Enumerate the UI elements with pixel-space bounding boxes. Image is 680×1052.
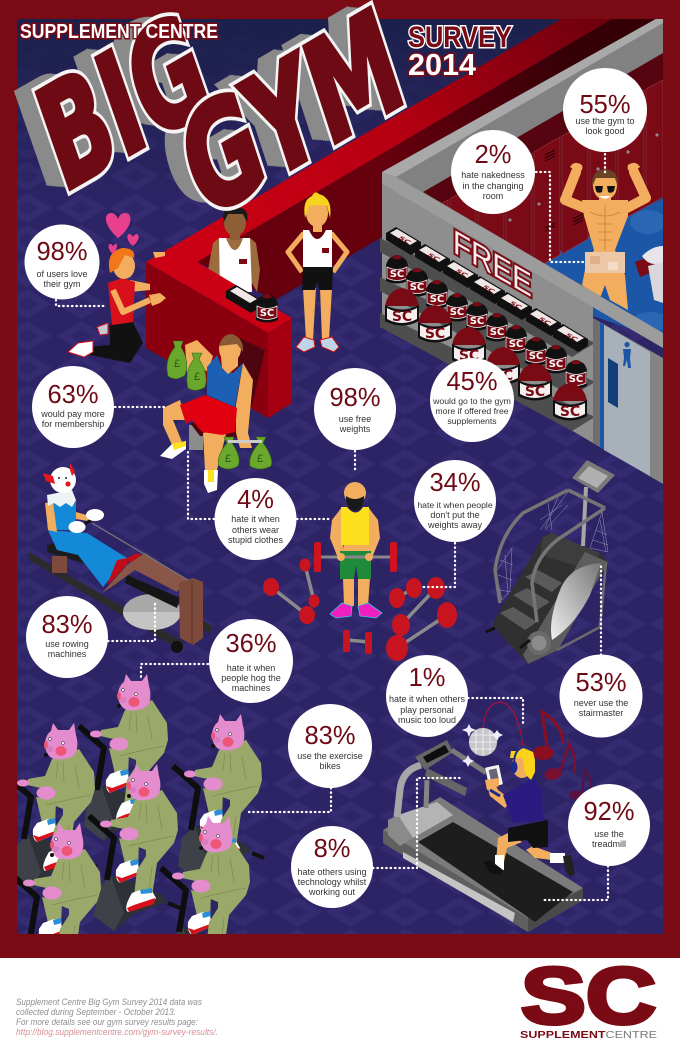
logo: Supplement Centre: SC: [521, 951, 656, 1040]
callout: 36% hog machines: [209, 619, 293, 703]
callout: 2% nakedness: room: [483, 191, 503, 201]
panel: small supplement tubs: SC: [430, 294, 444, 305]
panel: changing room: [422, 53, 668, 340]
panel: boxes on top shelf: SC: [396, 235, 413, 245]
heading: Survey: SURVEY: [408, 21, 512, 54]
text block: survey credits: For more details see our gym survey results page:: [16, 1017, 198, 1028]
panel: large supplement tubs: [385, 288, 587, 420]
panel: small supplement tubs: SC: [410, 282, 424, 293]
callout: 63% pay more: for membership: [42, 419, 104, 429]
callout: 34% weights away: 34%: [429, 469, 481, 497]
text block: survey credits: [16, 997, 218, 1038]
icon: sink and stool: [635, 246, 663, 303]
figure: bodybuilder with sunglasses: [565, 163, 646, 310]
callout: 63% pay more: would pay more: [40, 409, 105, 419]
panel: boxes on top shelf: SC: [480, 284, 497, 294]
callout: 8% technology: working out: [308, 887, 356, 897]
callout: 63% pay more: [32, 366, 114, 448]
callout: 45% free supplements: supplements: [447, 416, 497, 426]
callout: 8% technology: [291, 826, 373, 908]
callout: 98% free weights: weights: [339, 424, 371, 434]
callout: 36% hog machines: machines: [232, 683, 271, 693]
callout: 4% stupid clothes: others wear: [232, 525, 279, 535]
callout: 45% free supplements: more if offered free: [435, 406, 509, 416]
callout: 1% personal music: music too loud: [398, 715, 456, 725]
panel: large supplement tubs: SC: [425, 326, 445, 342]
callout: 53% stairmaster: stairmaster: [579, 708, 623, 718]
text block: survey credits: http://blog.supplementcentre.com/gym-survey-results/.: [16, 1027, 218, 1038]
icon: hearts: [106, 213, 139, 254]
callout: 1% personal music: hate it when others: [389, 694, 466, 704]
callout: 53% stairmaster: [560, 654, 642, 738]
callout: 55% look good: use the gym to: [575, 116, 635, 126]
callout: 83% rowing machines: machines: [48, 649, 87, 659]
icon: barbell: [314, 542, 397, 572]
icon: music notes: [534, 712, 591, 798]
panel: boxes on top shelf: SC: [453, 268, 470, 278]
panel: small supplement tubs: SC: [529, 351, 543, 362]
callout: 92% treadmill: use the: [594, 829, 624, 839]
figure: clown on rowing machine: [29, 463, 212, 653]
icon: money bags: £: [194, 371, 200, 383]
callout: 55% look good: [563, 68, 647, 152]
callout: 92% treadmill: treadmill: [592, 839, 626, 849]
figure: kneeling man in love: [68, 248, 166, 363]
figure: bald man lifting barbell: [330, 482, 382, 618]
callout: 36% hog machines: people hog the: [221, 673, 281, 683]
callout: 8% technology: 8%: [314, 835, 350, 863]
panel: footer: [0, 958, 680, 1052]
callout: 92% treadmill: [568, 784, 650, 866]
callout: 63% pay more: 63%: [47, 381, 99, 409]
figure: receptionist: [208, 207, 260, 292]
callout: 83% rowing machines: [26, 596, 108, 678]
panel: large supplement tubs: SC: [525, 384, 545, 400]
panel: large supplement tubs: SC: [560, 404, 580, 420]
callout: 45% free supplements: 45%: [446, 368, 498, 396]
panel: changing room door: [593, 318, 663, 484]
panel: boxes on top shelf: SC: [425, 252, 442, 262]
callout: 2% nakedness: in the changing: [462, 181, 524, 191]
callout: 83% exercise bikes: use the exercise: [297, 751, 363, 761]
icon: money bags: £: [225, 453, 231, 465]
panel: small supplement tubs: SC: [390, 269, 404, 280]
callout: 98% free weights: [314, 368, 396, 450]
callout: 34% weights away: hate it when people: [417, 500, 493, 510]
figure: stairmaster with cobwebs: [486, 460, 615, 664]
callout: 36% hog machines: 36%: [225, 630, 277, 658]
callout: 1% personal music: [386, 655, 468, 737]
label: FREE sign: FREE: [453, 222, 532, 305]
callout: 4% stupid clothes: stupid clothes: [228, 535, 284, 545]
icon: money bags: [167, 341, 272, 469]
icon: disco ball and sparkles: [462, 724, 503, 767]
callout: 83% exercise bikes: bikes: [319, 761, 341, 771]
panel: shelves: [380, 238, 595, 431]
callout: 83% exercise bikes: 83%: [304, 722, 356, 750]
callout: 98% love their gym: of users love: [36, 269, 88, 279]
callout: 4% stupid clothes: 4%: [237, 486, 274, 514]
text block: survey credits: Supplement Centre Big Gym Survey 2014 data was: [16, 997, 202, 1008]
heading: 2014: 2014: [408, 47, 477, 82]
icon: supplements on counter: SC: [260, 308, 274, 319]
callout: 92% treadmill: 92%: [583, 798, 635, 826]
panel: boxes on top shelf: SC: [563, 332, 580, 342]
panel: reception counter: [146, 262, 292, 418]
callout: 83% exercise bikes: [288, 704, 372, 788]
callout: 98% love their gym: [24, 224, 100, 300]
callout: 98% love their gym: 98%: [36, 238, 88, 266]
callout: 1% personal music: 1%: [409, 664, 445, 692]
panel: small supplement tubs: SC: [569, 374, 583, 385]
panel: large supplement tubs: SC: [459, 348, 479, 364]
callout: 36% hog machines: hate it when: [227, 663, 275, 673]
panel: small supplement tubs: SC: [490, 327, 504, 338]
panel: large supplement tubs: SC: [493, 368, 513, 384]
callout: 55% look good: look good: [585, 126, 625, 136]
callout: 98% free weights: use free: [339, 414, 371, 424]
panel: red carpet band: [146, 19, 612, 262]
callout: 98% free weights: 98%: [329, 384, 381, 412]
panel: boxes on top shelf: [386, 227, 588, 352]
callout: 8% technology: technology whilst: [298, 877, 367, 887]
callout: 34% weights away: [414, 460, 496, 542]
callout: 53% stairmaster: 53%: [575, 669, 627, 697]
text block: survey credits: collected during September - October 2013.: [16, 1007, 176, 1018]
callout: 53% stairmaster: never use the: [574, 698, 628, 708]
callout: 34% weights away: weights away: [427, 520, 483, 530]
icon: supplements on counter: [226, 285, 278, 322]
figure: muscle man with money bags: [160, 334, 265, 493]
panel: small supplement tubs: SC: [509, 339, 523, 350]
connectors: [56, 154, 608, 900]
figure: blonde instructor: [288, 192, 347, 352]
callout: 45% free supplements: [430, 358, 514, 442]
panel: boxes on top shelf: SC: [507, 300, 524, 310]
panel: pigs on exercise bikes: [6, 674, 264, 990]
callout: 98% love their gym: their gym: [43, 279, 81, 289]
figure: runner with headphones: [484, 747, 575, 877]
logo: Supplement Centre: SUPPLEMENT CENTRE: [520, 1029, 657, 1041]
figure: treadmill: [383, 740, 583, 932]
icon: dumbbells: [263, 558, 457, 661]
icon: headphone wire: [483, 702, 523, 747]
callout: 8% technology: hate others using: [297, 867, 367, 877]
panel: small supplement tubs: SC: [450, 307, 464, 318]
callout: 4% stupid clothes: [214, 478, 296, 560]
callout: 1% personal music: play personal: [400, 705, 454, 715]
panel: small supplement tubs: SC: [549, 359, 563, 370]
heading: Supplement Centre: SUPPLEMENT CENTRE: [20, 21, 218, 43]
panel: grey wall: [382, 15, 663, 443]
panel: small supplement tubs: [386, 255, 587, 388]
callout: 55% look good: 55%: [579, 91, 631, 119]
callout: 83% rowing machines: use rowing: [45, 639, 89, 649]
callout: 83% rowing machines: 83%: [41, 611, 93, 639]
callout: 2% nakedness: [451, 130, 535, 214]
panel: boxes on top shelf: SC: [536, 316, 553, 326]
callout: 2% nakedness: 2%: [475, 141, 511, 169]
panel: small supplement tubs: SC: [470, 316, 484, 327]
callout: 34% weights away: don't put the: [430, 510, 480, 520]
icon: money bags: £: [257, 453, 263, 465]
callout: 2% nakedness: hate nakedness: [461, 170, 525, 180]
callout: 45% free supplements: would go to the gym: [432, 396, 511, 406]
icon: money bags: £: [174, 358, 180, 370]
panel: large supplement tubs: SC: [392, 309, 412, 325]
callout: 4% stupid clothes: hate it when: [231, 514, 280, 524]
panel: dark inner wall behind counter: [197, 15, 663, 300]
